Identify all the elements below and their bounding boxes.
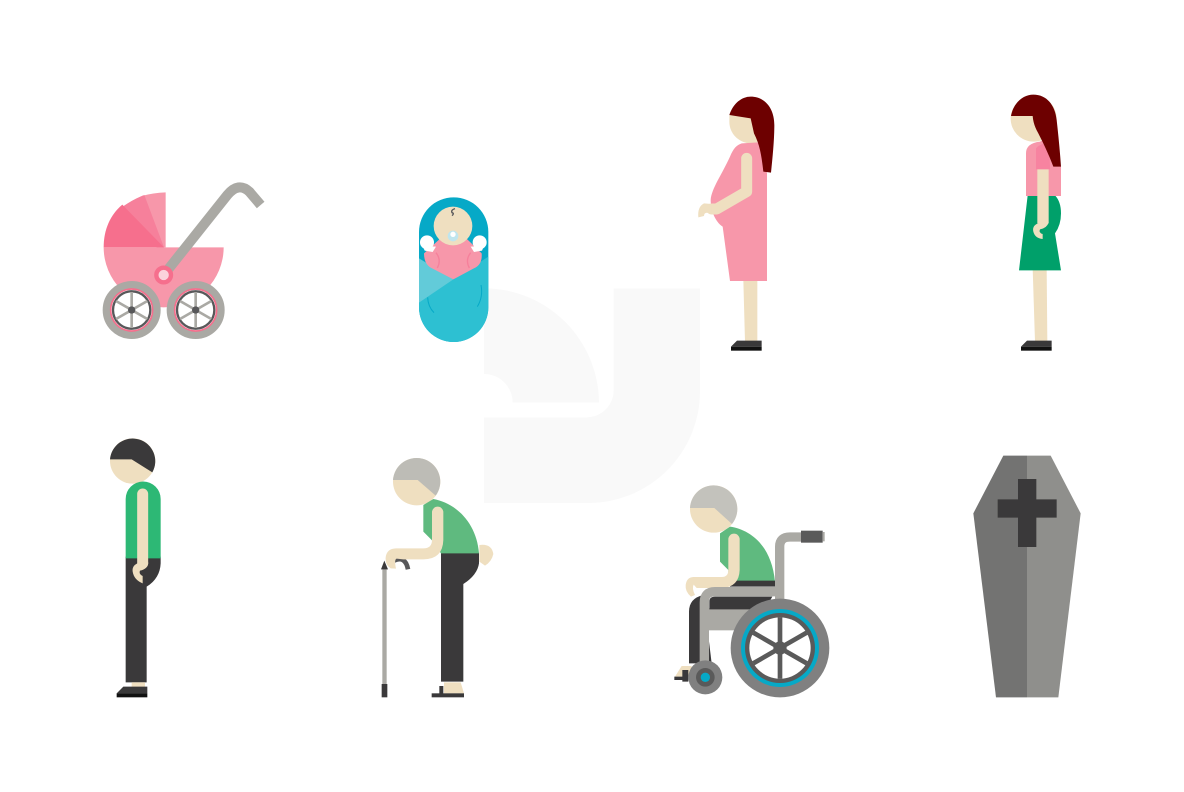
arm [1026,169,1060,223]
arm [712,158,747,209]
shoe [117,687,147,697]
waist [730,581,775,587]
shirt [126,481,161,558]
left wheel [107,285,157,335]
footrest [674,670,688,682]
icon: swaddled baby [419,197,488,342]
handle hub [156,268,171,282]
sleeve [1036,142,1050,169]
arm and hand [386,507,443,569]
shoe [432,686,464,697]
large wheel [731,599,829,697]
top [1026,139,1061,196]
icon: coffin [973,456,1081,697]
shirt [720,527,775,582]
handle grip [801,531,825,543]
back hand [479,545,493,566]
arm creases [436,253,471,268]
legs [689,595,712,663]
foot [444,682,464,693]
seat cushion [709,597,772,609]
right wheel [171,285,221,335]
pink body [424,239,482,279]
arm and hand [686,534,740,597]
head [393,458,440,505]
coffin left panel [973,456,1027,697]
icon: baby stroller [104,187,261,335]
watermark logo [484,288,700,503]
icon: adult man [110,438,161,697]
wheelchair frame [700,537,802,663]
trousers [441,553,479,682]
swaddle creases [428,285,482,313]
hair curl [452,209,455,216]
hand [1033,223,1049,239]
skirt [1019,195,1061,270]
hand [698,203,712,217]
icon: person in wheelchair [674,485,829,697]
trousers [126,557,161,682]
shoe [731,341,762,351]
hair [110,439,155,472]
shoe [1021,341,1052,351]
pacifier [448,231,458,241]
hand [133,563,148,583]
swaddle fold [419,258,453,303]
head [729,115,760,144]
hair [1011,95,1061,167]
swaddle front [419,257,488,342]
head [1011,96,1057,142]
small wheel [688,660,722,694]
shirt [423,499,479,553]
hair [729,97,774,173]
cane [381,559,408,697]
hair [393,458,440,496]
foot [132,682,145,687]
leg [1033,268,1047,342]
head [690,485,737,533]
head [110,438,155,484]
icon: elderly man with cane [381,458,493,697]
stroller handle [164,187,261,275]
coffin right panel [1027,456,1081,697]
right mitten [471,235,487,252]
arm [126,494,159,563]
dress [711,142,767,281]
stroller basket [104,247,224,307]
icon: pregnant woman [698,97,774,351]
foot [675,666,692,677]
head [434,207,472,245]
stroller canopy [104,192,166,247]
left mitten [420,235,436,252]
leg [743,280,757,342]
cross [998,479,1057,547]
swaddle outer [419,197,488,342]
hair [690,485,737,524]
icon: young woman [1011,95,1061,351]
